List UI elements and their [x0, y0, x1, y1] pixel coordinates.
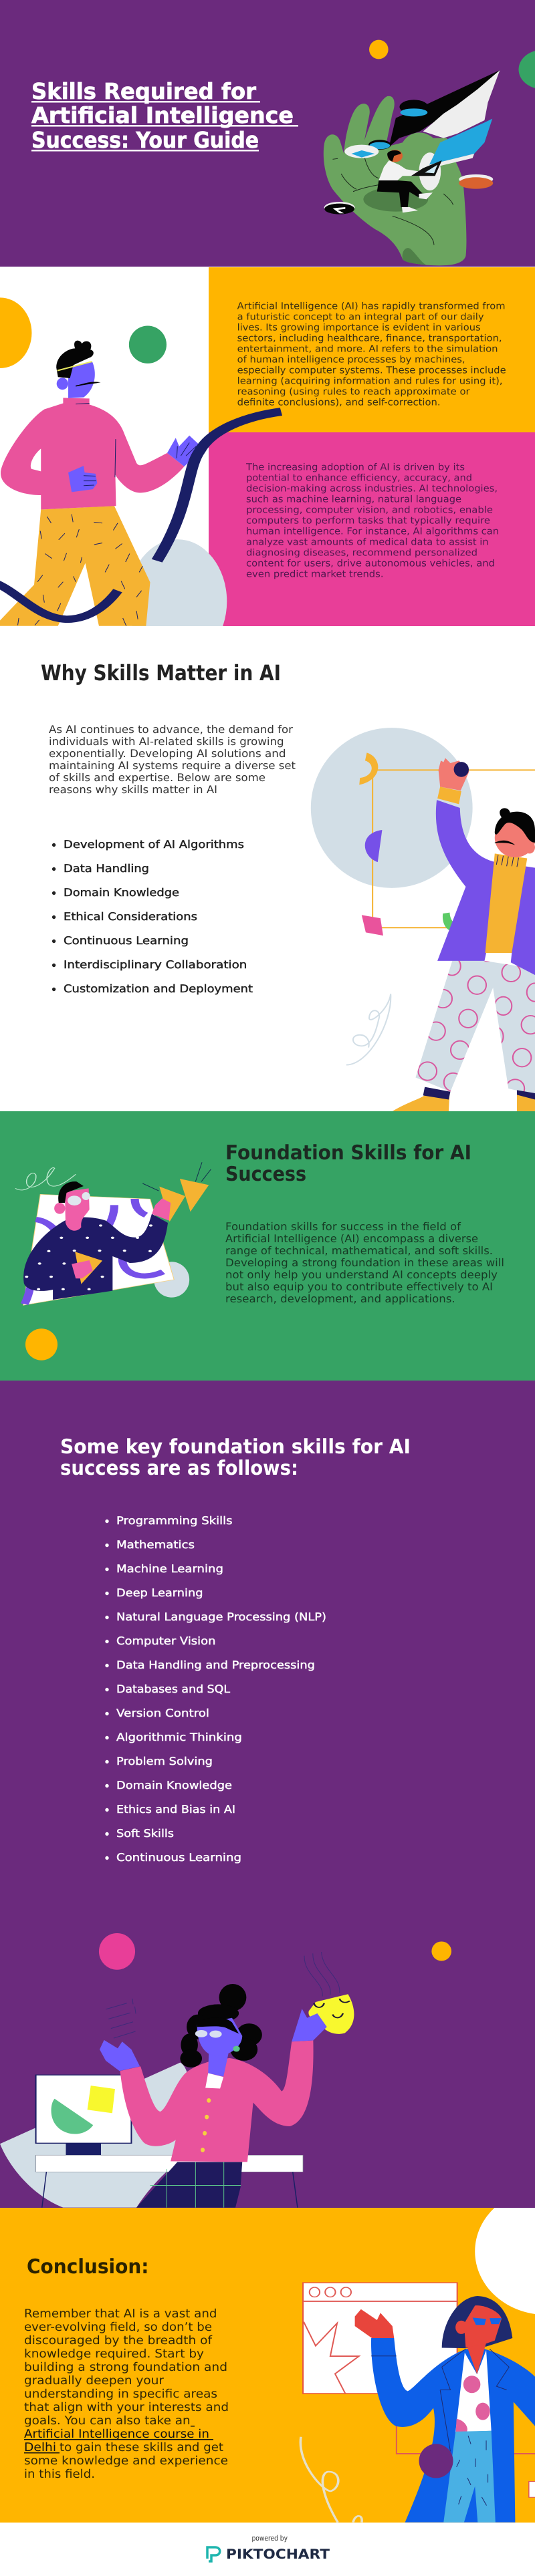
- list: foundation skills: Natural Language Processing (NLP): [116, 1610, 326, 1623]
- heading: Foundation Skills for AI Success: Foundation Skills for AI: [225, 1141, 471, 1165]
- heading: Conclusion: Conclusion:: [27, 2255, 148, 2279]
- heading: Why Skills Matter in AI: Why Skills Matter in AI: [41, 660, 281, 686]
- logo wordmark: PIKTOCHART: [226, 2546, 330, 2562]
- text block: AI adoption paragraph: content for users, drive autonomous vehicles, and: [246, 559, 495, 569]
- list: foundation skills: Mathematics: [116, 1538, 195, 1551]
- list: foundation skills: Ethics and Bias in AI: [116, 1803, 235, 1816]
- list: reasons why skills matter: Interdisciplinary Collaboration: [64, 958, 247, 971]
- heading: key foundation skills: Some key foundation skills for AI: [60, 1435, 411, 1459]
- list: foundation skills: Computer Vision: [116, 1634, 215, 1647]
- panel: yellow intro: [209, 267, 535, 432]
- list: foundation skills: Continuous Learning: [116, 1851, 241, 1864]
- text block: conclusion paragraph: Remember that AI is a vast and: [24, 2307, 217, 2321]
- text block: AI intro paragraph: of human intelligence processes by machines,: [237, 354, 465, 365]
- heading: key foundation skills: success are as follows:: [60, 1457, 298, 1480]
- list: foundation skills: Databases and SQL: [116, 1683, 230, 1695]
- title: Artificial Intelligence: [31, 102, 294, 128]
- text block: AI adoption paragraph: diagnosing diseases, recommend personalized: [246, 548, 477, 559]
- text block: AI intro paragraph: a futuristic concept to an integral part of our daily: [237, 311, 484, 322]
- text block: foundation paragraph: not only help you understand AI concepts deeply: [225, 1268, 498, 1281]
- illustration: man with triangles: [15, 1162, 211, 1305]
- text block: conclusion paragraph: Delhi: [24, 2441, 56, 2454]
- text block: conclusion paragraph: building a strong foundation and: [24, 2361, 227, 2374]
- list: foundation skills: [106, 1514, 326, 1864]
- list: foundation skills: Version Control: [116, 1707, 209, 1719]
- text block: AI intro paragraph: entertainment, and more. AI refers to the simulation: [237, 343, 498, 354]
- text block: AI adoption paragraph: decision-making across industries. AI technologies,: [246, 484, 498, 494]
- text block: conclusion paragraph: goals. You can also take an: [24, 2414, 191, 2428]
- text block: foundation paragraph: [225, 1220, 504, 1305]
- icon: hero decorative circles: [369, 40, 535, 89]
- text block: conclusion paragraph: to gain these skills and get: [60, 2441, 223, 2454]
- text block: why skills paragraph: [49, 723, 296, 796]
- text block: conclusion paragraph: [24, 2307, 229, 2481]
- panel: pink intro: [209, 432, 535, 626]
- illustration: woman with cup at desk: [0, 1933, 451, 2208]
- illustration: woman presenting at chart window: [300, 2188, 535, 2523]
- text block: why skills paragraph: As AI continues to advance, the demand for: [49, 723, 293, 736]
- panel: key foundation skills: [0, 1381, 535, 2208]
- text block: AI adoption paragraph: analyze vast amounts of medical data to assist in: [246, 537, 489, 548]
- text block: conclusion paragraph: discouraged by the breadth of: [24, 2334, 213, 2347]
- text block: AI adoption paragraph: such as machine learning, natural language: [246, 494, 461, 505]
- list: foundation skills: Domain Knowledge: [116, 1779, 232, 1792]
- text block: foundation paragraph: Foundation skills for success in the field of: [225, 1220, 461, 1233]
- footer: powered by Piktochart: powered by: [251, 2534, 288, 2543]
- text block: conclusion paragraph: gradually deepen your: [24, 2374, 165, 2388]
- text block: why skills paragraph: of skills and expertise. Below are some: [49, 771, 265, 784]
- text block: conclusion paragraph: Artificial Intelligence course in: [24, 2428, 209, 2441]
- list: reasons why skills matter: Data Handling: [64, 862, 149, 875]
- text block: AI intro paragraph: definite conclusions), and self-correction.: [237, 397, 441, 408]
- illustration: man arranging shapes: [311, 728, 535, 1111]
- list: reasons why skills matter: Customization and Deployment: [64, 982, 253, 995]
- text block: AI adoption paragraph: [245, 462, 499, 580]
- panel: intro left illustration background: [0, 267, 535, 664]
- text block: conclusion paragraph: understanding in specific areas: [24, 2388, 217, 2401]
- list: foundation skills: Algorithmic Thinking: [116, 1731, 242, 1743]
- heading: key foundation skills: [61, 1438, 409, 1475]
- text block: why skills paragraph: exponentially. Developing AI solutions and: [49, 747, 286, 760]
- list: foundation skills: Soft Skills: [116, 1827, 174, 1840]
- text block: AI intro paragraph: Artificial Intelligence (AI) has rapidly transformed from: [237, 301, 506, 311]
- text block: foundation paragraph: range of technical, mathematical, and soft skills.: [225, 1244, 493, 1257]
- panel: foundation skills: [0, 1111, 535, 1381]
- panel: conclusion: [0, 2188, 535, 2523]
- text block: conclusion paragraph: that align with your interests and: [24, 2401, 229, 2414]
- title: [31, 78, 298, 153]
- list: reasons why skills matter: Ethical Considerations: [64, 910, 197, 923]
- list: foundation skills: Programming Skills: [116, 1514, 233, 1527]
- text block: AI adoption paragraph: potential to enhance efficiency, accuracy, and: [246, 473, 472, 484]
- text block: conclusion paragraph: in this field.: [24, 2468, 95, 2481]
- text block: why skills paragraph: reasons why skills matter in AI: [49, 783, 217, 796]
- icon: yellow circle: [25, 1328, 58, 1361]
- list: reasons why skills matter: Continuous Learning: [64, 934, 189, 947]
- text block: AI intro paragraph: learning (acquiring information and rules for using it),: [237, 376, 503, 386]
- text block: AI intro paragraph: [237, 301, 506, 408]
- list: foundation skills: Problem Solving: [116, 1755, 213, 1767]
- text block: AI intro paragraph: especially computer systems. These processes include: [237, 365, 506, 376]
- list: reasons why skills matter: Development of AI Algorithms: [64, 838, 244, 851]
- text block: AI intro paragraph: sectors, including healthcare, finance, transportation,: [237, 333, 502, 343]
- text block: AI adoption paragraph: computers to perform tasks that typically require: [246, 516, 490, 527]
- text block: AI intro paragraph: reasoning (using rules to reach approximate or: [237, 386, 470, 397]
- list: foundation skills: Machine Learning: [116, 1562, 223, 1575]
- footer: powered by Piktochart: [207, 2534, 330, 2562]
- heading: Foundation Skills for AI Success: [225, 1141, 471, 1186]
- text block: conclusion paragraph: some knowledge and experience: [24, 2454, 228, 2468]
- illustration: hand with analyst and charts: [324, 70, 500, 265]
- text block: AI adoption paragraph: processing, computer vision, and robotics, enable: [246, 505, 493, 516]
- list: foundation skills: Deep Learning: [116, 1586, 203, 1599]
- list: foundation skills: Data Handling and Preprocessing: [116, 1659, 315, 1671]
- text block: conclusion paragraph: knowledge required. Start by: [24, 2347, 204, 2361]
- text block: foundation paragraph: Artificial Intelligence (AI) encompass a diverse: [225, 1232, 478, 1245]
- illustration: man with ribbon: [0, 297, 281, 664]
- panel: hero: [0, 0, 535, 267]
- icon: Piktochart logo mark: [207, 2547, 220, 2561]
- heading: Foundation Skills for AI Success: Success: [225, 1163, 306, 1186]
- title: Success: Your Guide: [31, 127, 259, 153]
- text block: foundation paragraph: research, development, and applications.: [225, 1292, 455, 1305]
- title: Skills Required for: [31, 78, 257, 104]
- list: reasons why skills matter: Domain Knowledge: [64, 886, 179, 899]
- text block: why skills paragraph: individuals with AI-related skills is growing: [49, 735, 284, 748]
- text block: AI adoption paragraph: even predict market trends.: [246, 569, 384, 580]
- text block: why skills paragraph: maintaining AI systems require a diverse set: [49, 759, 296, 772]
- text block: foundation paragraph: but also equip you to contribute effectively to AI: [225, 1280, 493, 1293]
- text block: AI adoption paragraph: The increasing adoption of AI is driven by its: [245, 462, 465, 473]
- text block: AI adoption paragraph: human intelligence. For instance, AI algorithms can: [246, 527, 499, 537]
- text block: foundation paragraph: Developing a strong foundation in these areas will: [225, 1256, 504, 1269]
- text block: conclusion paragraph: ever-evolving field, so don’t be: [24, 2321, 212, 2334]
- text block: AI intro paragraph: lives. Its growing importance is evident in various: [237, 322, 481, 333]
- list: reasons why skills matter: [52, 838, 253, 995]
